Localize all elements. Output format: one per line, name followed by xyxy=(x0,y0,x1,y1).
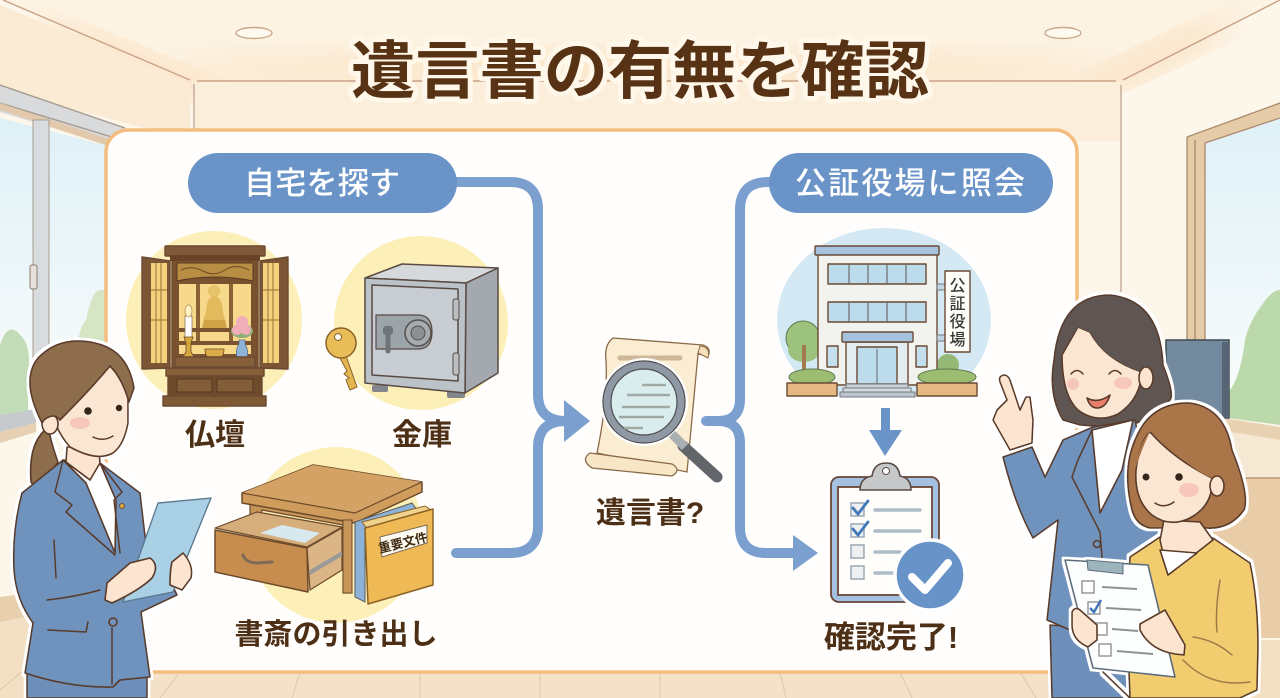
arrow: will to notary and confirmation xyxy=(706,182,795,553)
icon: clipboard with check xyxy=(831,463,965,610)
hair xyxy=(30,341,134,423)
icon: study desk and file xyxy=(215,447,433,623)
neck xyxy=(66,447,100,480)
sweater xyxy=(1103,537,1258,698)
label: confirmation complete: 確認完了! xyxy=(824,620,958,655)
face xyxy=(1071,370,1121,374)
icon: notary office: 公 xyxy=(949,277,966,295)
pill: home search: 自宅を探す xyxy=(244,166,400,201)
hair back xyxy=(1052,295,1171,428)
monitor xyxy=(1166,340,1229,418)
hands xyxy=(105,558,156,603)
sleeve folds xyxy=(1183,580,1250,683)
pill: home search xyxy=(188,153,457,213)
arrow: home search to will xyxy=(440,182,566,553)
icon: study desk and file: 重要文件 xyxy=(377,529,429,556)
face xyxy=(84,407,92,415)
hand pointing xyxy=(993,375,1033,450)
icon: will scroll with magnifier xyxy=(585,338,717,477)
label: will?: 遺言書? xyxy=(596,497,704,530)
character: right advisor xyxy=(993,295,1171,698)
head xyxy=(52,360,128,456)
pill: notary inquiry xyxy=(769,153,1053,213)
hands xyxy=(1072,608,1097,647)
label: study drawer: 書斎の引き出し xyxy=(234,618,438,651)
head xyxy=(1136,432,1212,522)
face xyxy=(1142,474,1150,480)
icon: notary office: 場 xyxy=(949,331,966,349)
icon: notary office: 証 xyxy=(949,295,966,313)
lapels xyxy=(55,460,122,555)
icon: buddhist altar xyxy=(126,231,302,409)
ear xyxy=(42,414,58,434)
skirt xyxy=(27,670,147,698)
bangs xyxy=(1062,310,1152,372)
label: safe: 金庫 xyxy=(392,419,452,452)
arrow: office to checklist xyxy=(869,408,902,456)
icon: notary office xyxy=(777,228,991,412)
bangs xyxy=(1135,413,1222,478)
shirt xyxy=(63,460,116,553)
skirt xyxy=(1050,625,1130,698)
head xyxy=(1062,327,1142,418)
shirt collar xyxy=(1160,550,1197,575)
suit xyxy=(1003,420,1160,630)
ponytail xyxy=(31,430,58,485)
icon: safe and key xyxy=(326,236,508,410)
shirt xyxy=(1092,420,1133,513)
main panel xyxy=(106,130,1077,672)
character: left advisor xyxy=(14,341,211,698)
neck xyxy=(1160,520,1213,575)
right window xyxy=(1187,103,1280,638)
pill: notary inquiry: 公証役場に照会 xyxy=(795,166,1025,201)
hair back xyxy=(1128,403,1246,528)
arrow head: to will xyxy=(564,400,590,442)
clipboard xyxy=(1065,560,1175,677)
arrow head: to checklist xyxy=(793,535,818,571)
label: altar: 仏壇 xyxy=(185,419,245,452)
character: client woman with checklist xyxy=(1065,403,1258,698)
icon: notary office: 役 xyxy=(949,313,966,331)
ear xyxy=(1210,476,1224,496)
suit jacket xyxy=(14,460,177,687)
clipboard xyxy=(123,498,211,602)
left window xyxy=(0,85,125,443)
title: 遺言書の有無を確認 xyxy=(351,37,929,107)
